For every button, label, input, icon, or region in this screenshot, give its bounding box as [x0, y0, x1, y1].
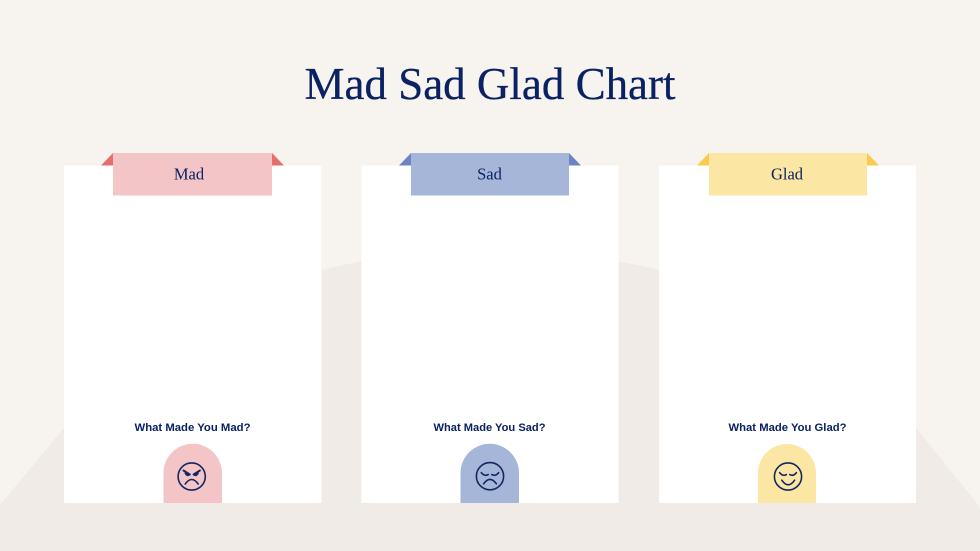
ribbon: sad	[411, 153, 569, 196]
panel: mad	[64, 153, 322, 503]
icon: angry face	[178, 463, 205, 490]
arch: mad	[164, 444, 222, 503]
ribbon fold: glad	[697, 153, 879, 166]
ribbon fold: sad	[399, 153, 581, 166]
card: mad	[64, 166, 322, 503]
prompt: glad: What Made You Glad?	[728, 422, 847, 434]
card: sad	[362, 166, 618, 503]
ribbon label: glad: Glad	[771, 164, 804, 184]
prompt: mad: What Made You Mad?	[134, 422, 251, 434]
ribbon label: mad: Mad	[174, 164, 205, 184]
panel: sad	[362, 153, 618, 503]
ribbon: glad	[709, 153, 867, 196]
prompt: sad: What Made You Sad?	[434, 422, 546, 434]
arch: sad	[460, 444, 519, 503]
title: Mad Sad Glad Chart	[304, 59, 676, 109]
icon: sad face	[476, 463, 504, 490]
arch: glad	[758, 444, 816, 503]
ribbon fold: mad	[101, 153, 284, 166]
icon: glad face	[774, 463, 802, 490]
card: glad	[659, 166, 916, 503]
ribbon: mad	[113, 153, 272, 196]
ribbon label: sad: Sad	[477, 164, 503, 184]
panel: glad	[659, 153, 916, 503]
background hill	[0, 255, 980, 551]
